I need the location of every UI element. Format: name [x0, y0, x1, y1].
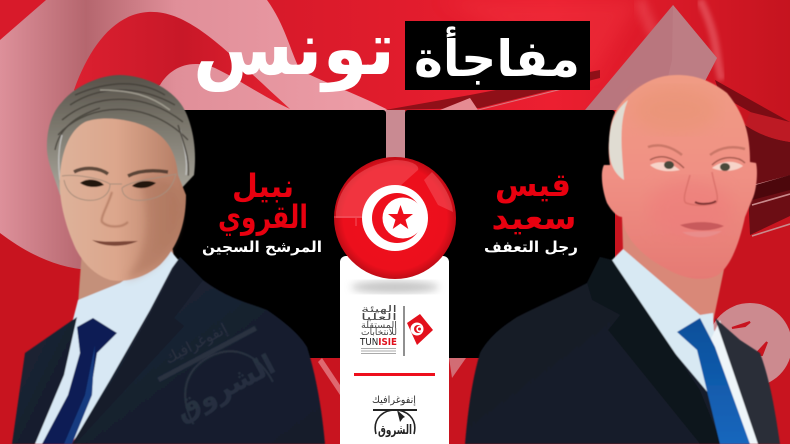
jacket: [12, 257, 325, 444]
eyes: [650, 162, 743, 171]
ISIE Arabic name: للانتخابات: [361, 328, 397, 338]
nose: [102, 192, 128, 226]
right dark ribbon: [715, 80, 790, 134]
Shorouk logo: [372, 395, 417, 438]
sphere shadow: [351, 281, 439, 293]
ISIE small print: [361, 348, 396, 354]
ISIE Arabic name: الهيئة: [361, 305, 397, 315]
mouth: [680, 222, 724, 230]
ISIE logo: [359, 305, 433, 356]
panel: left black card: [170, 110, 386, 358]
jacket: [465, 257, 780, 444]
face: [60, 119, 186, 281]
title word: Tunisia: تونس: [193, 6, 395, 93]
portrait: Nabil Karoui: [12, 75, 325, 444]
mouth: [92, 240, 138, 246]
lower-middle rays: [449, 358, 466, 378]
panel: right black card: [405, 110, 615, 358]
Tunisia flag sphere: [334, 157, 456, 279]
title word: surprise: مفاجأة: [414, 26, 580, 88]
red divider: [354, 373, 435, 376]
flag star: [388, 205, 413, 229]
logo caption: إنفوغرافيك: [372, 395, 416, 406]
gap between panels: [386, 110, 405, 160]
head: [602, 75, 757, 279]
tie: [42, 318, 117, 444]
name second line: القروي: [218, 198, 308, 236]
eyes: [80, 180, 156, 188]
neck: [78, 235, 175, 320]
portrait: Kais Saied: [465, 75, 780, 444]
ISIE Arabic name: المستقلة: [361, 321, 397, 331]
emblem: [708, 303, 790, 387]
hair: [47, 75, 195, 195]
subtitle: رجل التعفف: [484, 238, 578, 256]
glasses: [62, 174, 176, 200]
white side hair: [609, 100, 628, 180]
title box: [405, 21, 590, 90]
name first line: نبيل: [232, 167, 294, 205]
shirt: [35, 250, 180, 444]
name first line: قيس: [495, 166, 571, 204]
title: [193, 6, 590, 93]
neck: [622, 215, 727, 322]
watermark: إنفوغرافيك: [162, 320, 230, 367]
text block: Kais Saied: [484, 166, 578, 256]
subtitle: المرشح السجين: [202, 238, 322, 256]
forehead tint: [633, 88, 717, 132]
cheek tint: [648, 180, 732, 240]
flag white disc: [362, 185, 428, 251]
panel: white centre pillar: [340, 256, 449, 444]
sphere highlights: [336, 160, 418, 218]
logo mark: الشروق: [378, 423, 412, 438]
nose: [684, 172, 717, 205]
ISIE Arabic name: [361, 305, 397, 338]
eyebrows: [74, 168, 168, 176]
ISIE flag card: [407, 314, 433, 345]
ISIE latin name: TUNISIE: [359, 337, 397, 348]
ISIE divider: [403, 306, 405, 356]
flag crescent: [372, 193, 424, 243]
ISIE Arabic name: العليا: [361, 313, 397, 323]
text block: Nabil Karoui: [202, 167, 322, 256]
tie: [677, 318, 750, 444]
watermark: [148, 307, 282, 429]
shirt: [612, 249, 760, 444]
watermark: الشروق: [169, 347, 281, 428]
name second line: سعيد: [492, 199, 576, 237]
pink diamond: [585, 5, 717, 110]
